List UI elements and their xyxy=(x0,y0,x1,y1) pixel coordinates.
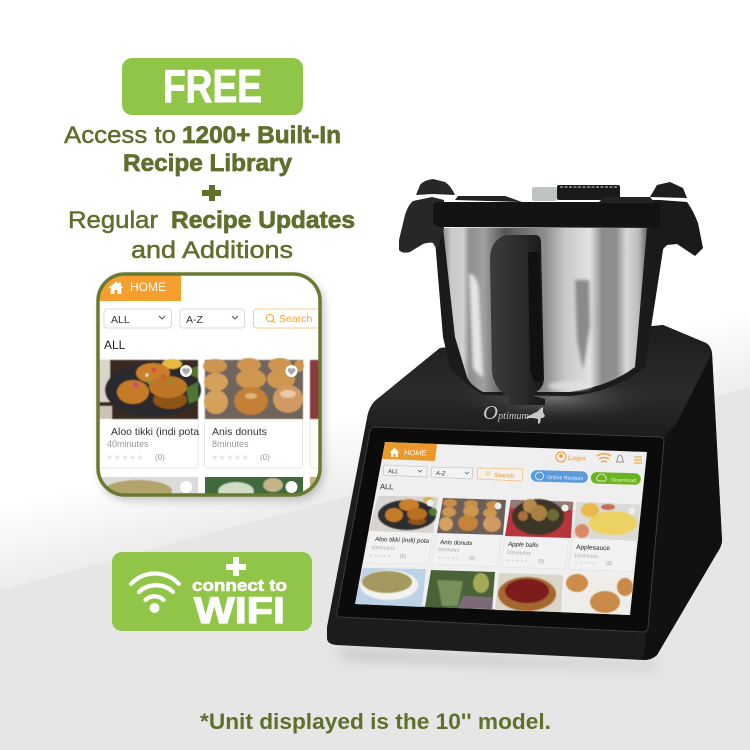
icon: wifi xyxy=(131,574,179,613)
jug: side walls xyxy=(434,228,666,396)
screen dropdowns and search xyxy=(383,465,523,481)
touchscreen bezel xyxy=(337,427,664,632)
search button: Search xyxy=(279,313,312,325)
screen recipe card 2: 8minutes xyxy=(438,547,460,554)
base body xyxy=(327,325,722,660)
screen thumbnails row two xyxy=(355,568,633,615)
lid top and dial xyxy=(455,185,655,203)
screen login and status icons: Login xyxy=(568,455,586,462)
recipe card: Anis donuts: ★★★★★ xyxy=(211,453,249,462)
screen home tab xyxy=(382,442,437,461)
home tab: HOME xyxy=(130,280,166,294)
screen recipe card 1: (0) xyxy=(400,554,406,560)
recipe card: Anis donuts xyxy=(203,358,304,468)
jug: left grip xyxy=(416,179,455,195)
screen recipe card 4: ★★★★★ xyxy=(574,560,597,567)
heading: recipe library text xyxy=(64,122,355,264)
recipe card: Aloo tikki: ★★★★★ xyxy=(106,453,144,462)
panel: phone app screenshot xyxy=(90,274,340,502)
screen home tab: HOME xyxy=(404,448,428,457)
search button xyxy=(254,309,326,328)
brand logo: Optimum xyxy=(483,402,529,424)
badge: connect to WIFI xyxy=(112,552,312,631)
screen recipe card 3: (0) xyxy=(538,559,544,565)
home tab xyxy=(98,274,181,301)
screen recipe card 4: Applesauce xyxy=(576,544,611,552)
screen login and status icons xyxy=(556,452,642,463)
heading: recipe library text: Access to xyxy=(64,122,176,149)
screen recipe card 3 xyxy=(501,499,573,569)
dropdown: A-Z: A-Z xyxy=(186,314,204,326)
heading: recipe library text: Recipe Updates xyxy=(171,207,355,234)
screen recipe card 2 xyxy=(432,498,506,567)
jug: steel bowl xyxy=(443,228,647,392)
screen recipe card 3: ★★★★★ xyxy=(506,558,529,565)
screen dropdowns and search: ALL xyxy=(387,469,398,475)
screen dropdowns and search: A-Z xyxy=(435,471,446,477)
jug: handle xyxy=(490,235,545,405)
screen recipe card 1: Aloo tikki (indi) pota xyxy=(374,536,430,545)
badge: connect to WIFI: connect to xyxy=(192,576,287,595)
heading: recipe library text: and Additions xyxy=(131,237,293,264)
screen label: ALL: ALL xyxy=(380,482,394,491)
screen recipe card 3: 50minutes xyxy=(507,550,531,557)
jug: left wing handle xyxy=(399,197,444,253)
touchscreen xyxy=(355,442,647,615)
screen recipe card 1 xyxy=(363,496,438,564)
screen dropdowns and search: Search xyxy=(494,473,514,480)
screen recipe card 4: (0) xyxy=(606,561,612,567)
product: multicooker xyxy=(327,179,722,670)
dropdown: ALL xyxy=(104,309,172,328)
badge: FREE xyxy=(122,58,303,115)
phone border xyxy=(98,274,320,495)
heading: recipe library text: 1200+ Built-In xyxy=(182,122,341,149)
ground shadow xyxy=(335,648,660,670)
recipe card: Aloo tikki: Aloo tikki (indi pota xyxy=(111,426,199,438)
screen recipe card 2: ★★★★★ xyxy=(437,555,460,562)
recipe card: Aloo tikki xyxy=(90,359,201,468)
recipe card: Anis donuts: 8minutes xyxy=(212,439,249,449)
screen recipe card 1: 40minutes xyxy=(371,545,395,552)
dropdown: A-Z xyxy=(180,309,244,328)
footnote: *Unit displayed is the 10'' model. xyxy=(200,709,551,734)
dropdown: ALL: ALL xyxy=(111,314,130,326)
heading: recipe library text: Regular xyxy=(68,207,158,234)
screen button: online recipes: Online Recipes xyxy=(547,475,583,482)
recipe card: Anis donuts: Anis donuts xyxy=(212,426,267,438)
recipe card: Aloo tikki: 40minutes xyxy=(107,439,149,449)
recipe row two thumbnails xyxy=(102,477,317,494)
recipe card: partial xyxy=(309,359,318,468)
screen recipe card 2: Anis donuts xyxy=(439,539,472,547)
section label: ALL: ALL xyxy=(104,338,126,352)
screen button: download xyxy=(591,472,641,485)
jug: right wing handle xyxy=(650,200,703,256)
heading: recipe library text: Recipe Library xyxy=(123,150,293,177)
jug: right grip xyxy=(650,182,687,198)
screen button: download: Download xyxy=(611,478,636,484)
recipe card: Aloo tikki: (0) xyxy=(155,453,165,462)
screen recipe card 4 xyxy=(569,502,640,572)
screen recipe card 4: 15minutes xyxy=(574,553,598,560)
lid rim xyxy=(433,202,660,228)
screen button: online recipes xyxy=(531,470,588,483)
screen recipe card 1: ★★★★★ xyxy=(369,553,392,560)
screen recipe card 2: (0) xyxy=(469,556,475,562)
screen recipe card 3: Apple balls xyxy=(507,541,538,549)
badge: connect to WIFI: WIFI xyxy=(194,590,285,631)
recipe card: Anis donuts: (0) xyxy=(260,453,270,462)
badge: FREE: FREE xyxy=(163,60,262,112)
